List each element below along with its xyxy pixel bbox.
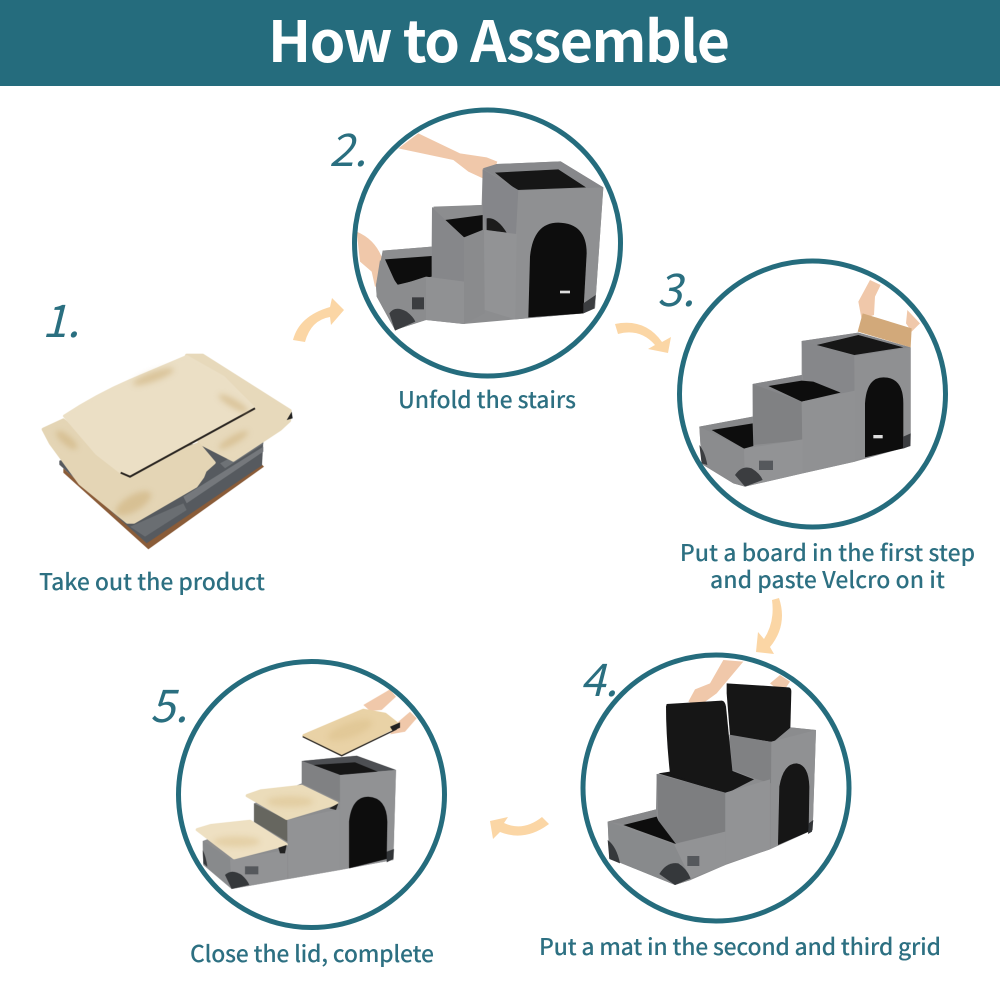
caption step 3: Put a board in the first step (680, 534, 975, 568)
circle frame step 3 (680, 261, 946, 527)
number 4: 4. (580, 644, 618, 709)
number 5: 5. (150, 670, 188, 735)
fur shading (213, 715, 374, 847)
number 2: 2. (329, 114, 366, 179)
step 4: inserting black mats (608, 660, 816, 885)
header banner (0, 0, 1000, 86)
circle frame step 5 (178, 662, 444, 928)
caption step 3: and paste Velcro on it (710, 561, 945, 595)
number 3: 3. (657, 254, 694, 319)
circle frame step 4 (583, 655, 849, 921)
doorway arch (528, 223, 587, 317)
middle step (433, 205, 483, 237)
top box front (854, 347, 911, 460)
lower mat (197, 821, 286, 858)
tray (699, 417, 753, 449)
brand tag (412, 297, 424, 309)
fur shading (53, 365, 250, 520)
arms (688, 660, 790, 707)
box silhouette backing (699, 333, 911, 487)
top box (729, 735, 772, 783)
number 1: 1. (42, 285, 80, 350)
top box back (802, 333, 911, 356)
brand tag (759, 461, 773, 470)
caption step 5: Close the lid, complete (190, 935, 434, 969)
step 1: product stack (43, 355, 293, 549)
top box back rim (483, 161, 603, 191)
folded grey panels (59, 440, 263, 543)
box silhouette backing (376, 161, 603, 330)
doorway arch (778, 763, 809, 845)
top box flap (802, 341, 854, 400)
caption step 4: Put a mat in the second and third grid (539, 928, 941, 962)
lower left mat (43, 420, 214, 522)
lid mat (304, 710, 399, 754)
mat edge (121, 408, 255, 477)
top box front (515, 187, 603, 319)
top box flap (483, 169, 518, 235)
middle step body (254, 803, 287, 842)
dark corner patches (203, 850, 249, 889)
arms (363, 689, 417, 734)
caption step 1: Take out the product (39, 563, 265, 597)
middle box (753, 375, 802, 402)
hands (858, 280, 920, 332)
hands (357, 133, 497, 287)
brand tag (687, 856, 699, 866)
lower step body (203, 841, 232, 889)
caption step 2: Unfold the stairs (398, 381, 576, 415)
arrow 2 to 3 (615, 323, 671, 353)
step 5: closing the lid (197, 689, 417, 889)
top box (302, 756, 396, 774)
top mat (65, 357, 254, 476)
arrow 1 to 2 (293, 298, 344, 342)
doorway arch (865, 377, 903, 457)
circle frame step 2 (354, 110, 620, 376)
dark corner patch (389, 309, 415, 331)
rear mat (727, 683, 791, 742)
cardboard board (858, 313, 912, 347)
wooden base board (63, 463, 264, 549)
middle mat (247, 786, 337, 818)
brand tag (245, 866, 258, 874)
arrow 4 to 5 (490, 817, 549, 839)
middle box top (658, 770, 754, 793)
dark corner patches (699, 445, 763, 487)
arrow 3 to 4 (756, 598, 782, 654)
step 3: unfolded stairs with board (699, 280, 920, 487)
box silhouette backing (203, 756, 396, 889)
right mat (185, 355, 290, 460)
doorway arch (349, 797, 387, 868)
middle box sides (657, 774, 725, 844)
step 2: unfolding stairs (357, 133, 603, 331)
dark corner patches (608, 840, 691, 885)
box silhouette backing (608, 727, 816, 885)
tray (608, 809, 657, 824)
lower step (383, 247, 432, 285)
front mat (666, 701, 733, 792)
